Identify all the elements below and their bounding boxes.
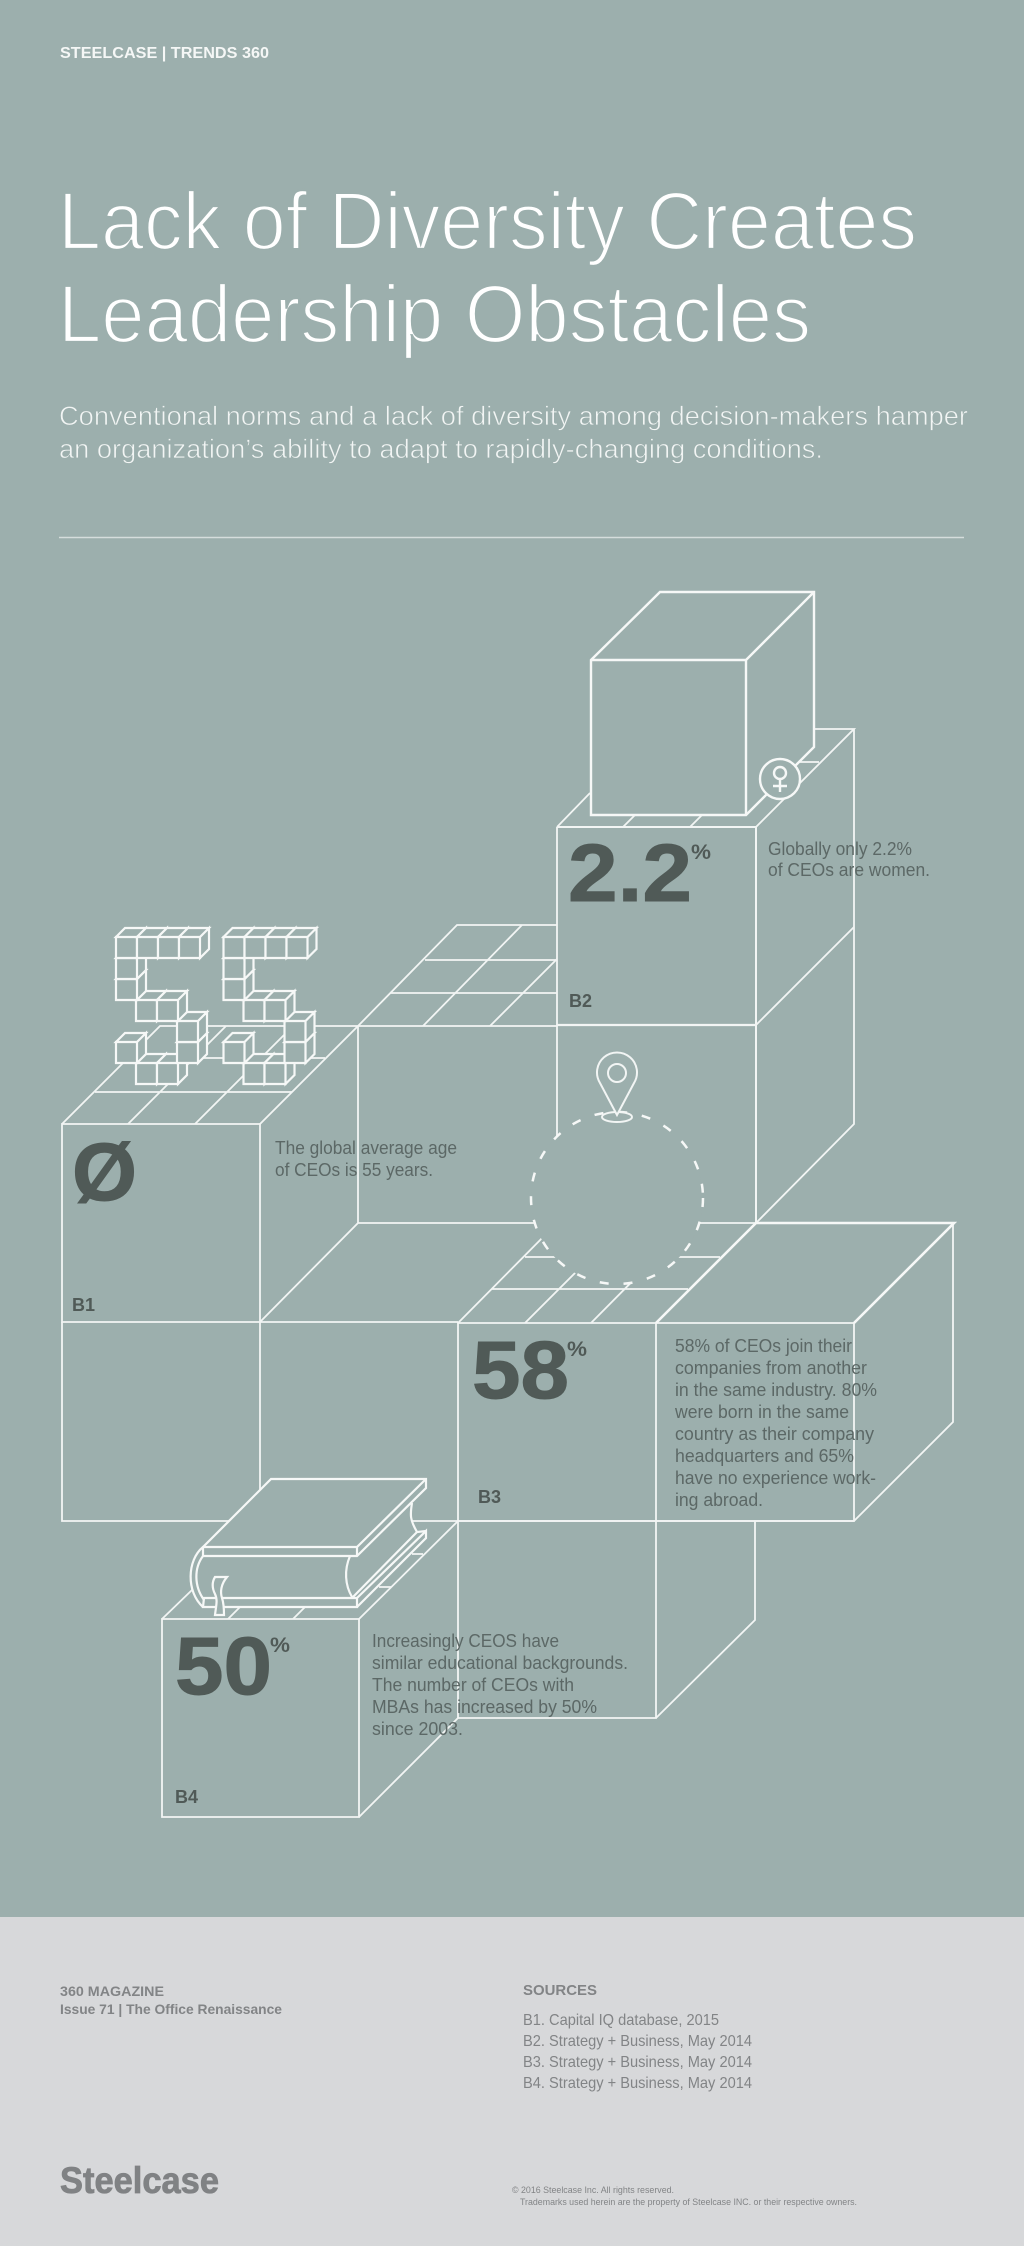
sources list: SOURCES (523, 1982, 597, 1999)
text: B2 description: of CEOs are women. (768, 860, 930, 880)
stat: 58%: % (567, 1338, 587, 1361)
text: B3 description: companies from another (675, 1358, 867, 1378)
text: B2 description (768, 839, 930, 880)
sources list: B3. Strategy + Business, May 2014 (523, 2054, 752, 2071)
bookmark ribbon (213, 1577, 227, 1615)
text: B4 description: since 2003. (372, 1719, 463, 1739)
sources list: B2. Strategy + Business, May 2014 (523, 2033, 752, 2050)
text: B1 description (275, 1138, 457, 1180)
book cover (203, 1479, 426, 1556)
stat: 2.2%: 2.2 (568, 828, 692, 919)
sources list: B4. Strategy + Business, May 2014 (523, 2075, 752, 2092)
text: B3 description: have no experience work- (675, 1468, 876, 1488)
footer panel (0, 1917, 1024, 2246)
text: B4 description: MBAs has increased by 50% (372, 1697, 597, 1717)
title: Lack of Diversity Creates (58, 176, 917, 267)
label: B1: B1 (72, 1295, 95, 1315)
text: B4 description: The number of CEOs with (372, 1675, 574, 1695)
subtitle: Conventional norms and a lack of diversity among decision-makers hamper (59, 401, 968, 431)
icon: female symbol (760, 759, 800, 799)
header label: STEELCASE | TRENDS 360 (60, 45, 269, 62)
second digit 5 (224, 928, 316, 1084)
text: B1 description: The global average age (275, 1138, 457, 1158)
copyright: Trademarks used herein are the property of Steelcase INC. or their respective owners. (520, 2197, 857, 2208)
block wireframe (62, 1026, 458, 1322)
first digit 5 (116, 928, 209, 1084)
subtitle: an organization’s ability to adapt to rapidly-changing conditions. (59, 434, 823, 464)
magazine credit (60, 1983, 282, 2017)
title: Leadership Obstacles (58, 269, 811, 360)
text: B4 description: similar educational backgrounds. (372, 1653, 628, 1673)
wireframe: back wall and floor grid (260, 925, 557, 1322)
block wireframe (557, 729, 854, 1223)
panel: B3 stat block (458, 1052, 954, 1521)
icon: location pin (597, 1052, 637, 1122)
wireframe: lower row of boxes (62, 1322, 854, 1718)
magazine credit: Issue 71 | The Office Renaissance (60, 2001, 282, 2017)
block top edges (656, 1223, 954, 1323)
title (58, 176, 917, 360)
block wireframe (458, 1223, 953, 1521)
magazine credit: 360 MAGAZINE (60, 1983, 164, 1999)
text: B4 description (372, 1631, 628, 1739)
stat: 50%: 50 (175, 1621, 272, 1712)
stat: 2.2%: % (691, 841, 711, 864)
sources list: B1. Capital IQ database, 2015 (523, 2012, 719, 2029)
text: B3 description: 58% of CEOs join their (675, 1336, 852, 1356)
text: B4 description: Increasingly CEOS have (372, 1631, 559, 1651)
stat: slashed zero glyph: Ø (72, 1127, 137, 1218)
text: B1 description: of CEOs is 55 years. (275, 1160, 433, 1180)
block wireframe (162, 1521, 458, 1817)
stat: 50%: % (270, 1634, 290, 1657)
panel: B1 stat block (62, 928, 458, 1322)
icon: book (191, 1479, 426, 1615)
text: B3 description: country as their company (675, 1424, 874, 1444)
text: B3 description: headquarters and 65% (675, 1446, 854, 1466)
text: B3 description: ing abroad. (675, 1490, 763, 1510)
book outlines (191, 1503, 426, 1607)
subtitle (59, 401, 968, 464)
label: B2: B2 (569, 991, 592, 1011)
copyright: © 2016 Steelcase Inc. All rights reserved. (512, 2185, 674, 2196)
panel: B4 stat block (162, 1479, 628, 1817)
text: B3 description (674, 1336, 877, 1510)
stat: 58%: 58 (472, 1325, 569, 1416)
label: B3: B3 (478, 1487, 501, 1507)
copyright (512, 2185, 857, 2208)
text: B3 description: were born in the same (674, 1402, 849, 1422)
label: B4: B4 (175, 1787, 198, 1807)
book body (191, 1503, 426, 1607)
sources list (523, 1982, 752, 2092)
text: B2 description: Globally only 2.2% (768, 839, 912, 859)
text: B3 description: in the same industry. 80% (675, 1380, 877, 1400)
icon: dashed globe (531, 1112, 703, 1284)
icon: 55 built from cubes (116, 928, 316, 1084)
Steelcase logo: Steelcase (60, 2160, 219, 2201)
icon: stacked cube (591, 592, 814, 815)
panel: B2 stat block (557, 592, 930, 1223)
